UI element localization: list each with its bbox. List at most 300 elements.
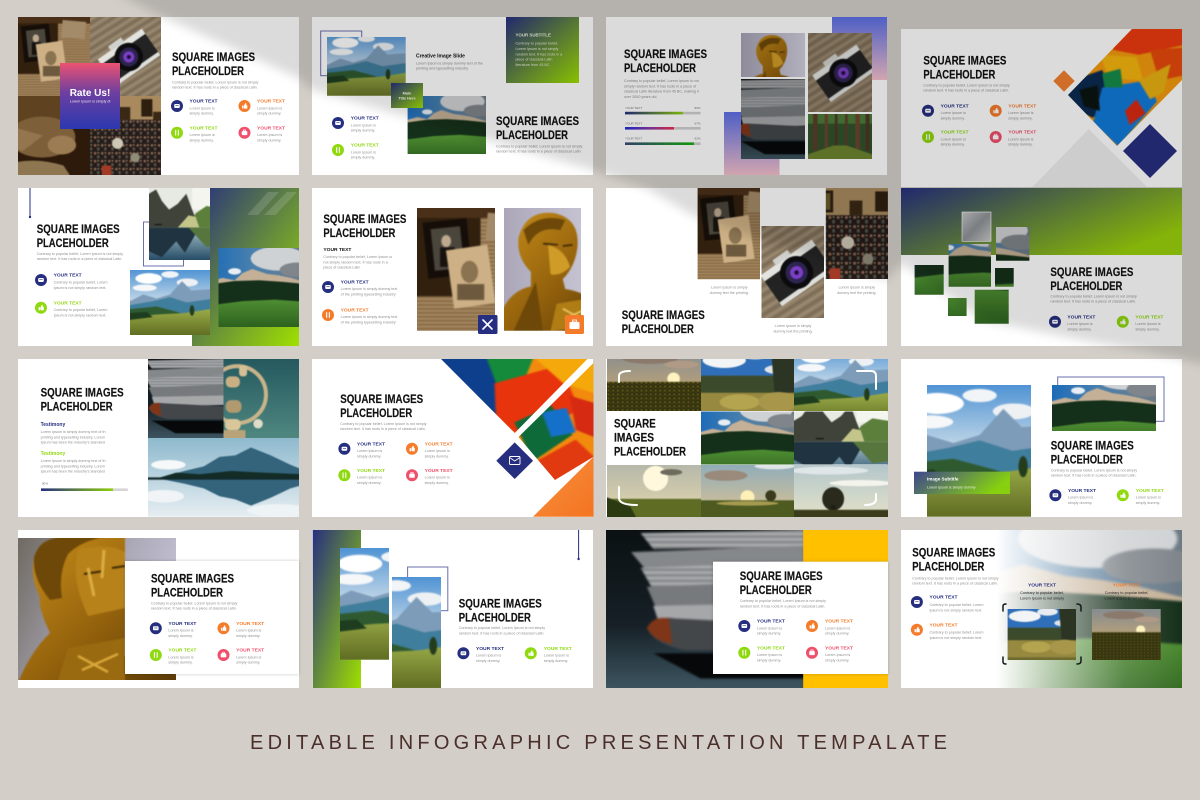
item: navy bbox=[1049, 314, 1095, 331]
heading: SQUARE IMAGES bbox=[1050, 267, 1134, 279]
creative image text: printing and typesetting industry bbox=[416, 67, 468, 71]
photo: lake bbox=[149, 188, 210, 260]
heading: PLACEHOLDER bbox=[323, 228, 396, 240]
item: navy bbox=[1049, 488, 1096, 505]
item: green: YOUR TEXT bbox=[168, 648, 196, 654]
item: green: Lorem Ipsum is bbox=[351, 150, 376, 154]
photo: dolomite backdrop bbox=[901, 509, 1200, 707]
testimony two: printing and typesetting industry. Lorem bbox=[41, 464, 105, 468]
description bbox=[624, 79, 699, 99]
item: navy: YOUR TEXT bbox=[351, 116, 379, 122]
photo: mountain portrait bbox=[927, 385, 1031, 517]
testimony two: Ipsum has been the industry's standard bbox=[41, 470, 105, 474]
item: green bbox=[171, 125, 218, 142]
item: green: simply dummy. bbox=[351, 156, 375, 160]
item: orange: YOUR TEXT bbox=[341, 307, 369, 313]
photo: old books bbox=[18, 17, 90, 96]
item: pink: YOUR TEXT bbox=[257, 125, 285, 131]
caption right bbox=[837, 285, 876, 295]
item: pink: simply dummy. bbox=[257, 138, 281, 142]
photo: boats bbox=[148, 359, 224, 438]
item: navy: YOUR TEXT bbox=[168, 621, 196, 627]
heading bbox=[1050, 267, 1134, 293]
description: random text. It has roots in a piece of classical Latin. bbox=[923, 88, 1009, 92]
photo: forest bbox=[808, 114, 872, 159]
column text navy bbox=[1020, 582, 1064, 600]
item: navy: YOUR TEXT bbox=[476, 646, 504, 652]
window light shadow overlay bbox=[110, 0, 1200, 366]
item: navy: simply dummy. bbox=[476, 659, 500, 663]
item: orange: Lorem Ipsum is bbox=[1008, 111, 1034, 115]
photo: reflection lake bbox=[148, 438, 299, 517]
item: navy bbox=[150, 621, 196, 638]
outline frame bbox=[321, 31, 362, 76]
footer title: EDITABLE INFOGRAPHIC PRESENTATION TEMPALATE bbox=[250, 732, 947, 754]
heading: SQUARE bbox=[614, 419, 656, 431]
photo: meadow trees bbox=[701, 359, 794, 411]
item: green: simply dummy. bbox=[757, 658, 781, 662]
photo: grey sky bbox=[962, 212, 991, 241]
item: orange bbox=[911, 622, 983, 640]
your text block: piece of classical Latin bbox=[323, 266, 360, 270]
subtitle bar: Lorem Ipsum is simply dummy bbox=[927, 485, 976, 489]
testimony one: Lorem Ipsum is simply dummy text of th bbox=[41, 430, 106, 434]
item: green: Lorem Ipsum is bbox=[168, 655, 194, 659]
your text block: Contrary to popular belief, Lorem Ipsum is bbox=[323, 255, 392, 259]
column text orange bbox=[1105, 582, 1149, 600]
item: orange bbox=[990, 103, 1036, 120]
photo: camera bbox=[90, 17, 161, 96]
item: navy: simply dummy. bbox=[168, 634, 193, 638]
slide 16: fading landscape bbox=[901, 509, 1200, 707]
column text orange: Contrary to popular belief, bbox=[1105, 591, 1148, 595]
item: pink bbox=[406, 468, 453, 485]
item: orange: YOUR TEXT bbox=[825, 619, 853, 625]
item: green bbox=[332, 143, 379, 160]
caption right: Lorem Ipsum is simply bbox=[838, 285, 875, 289]
item: orange: simply dummy. bbox=[236, 634, 260, 638]
photo: camera bbox=[762, 226, 824, 318]
subtitle panel: Lorem Ipsum is not simply bbox=[516, 47, 558, 51]
description: Contrary to popular belief, Lorem Ipsum is not simply bbox=[1051, 468, 1137, 472]
item: green: YOUR TEXT bbox=[351, 143, 379, 149]
slide 10: paint stripes bbox=[312, 359, 594, 517]
navy pin line bbox=[29, 188, 31, 218]
item: navy: simply dummy. bbox=[351, 129, 375, 133]
subtitle panel: Contrary to popular belief, bbox=[516, 42, 558, 46]
description bbox=[37, 252, 123, 261]
progress bar 80% bbox=[41, 481, 128, 491]
heading: SQUARE IMAGES bbox=[340, 394, 423, 406]
item: navy: Lorem Ipsum is bbox=[168, 629, 194, 633]
description bbox=[340, 422, 427, 431]
item: orange bbox=[806, 619, 853, 636]
your text block bbox=[323, 247, 392, 270]
description: simply random text. It has roots in a piece of bbox=[624, 84, 697, 88]
description: Contrary to popular belief, Lorem Ipsum is not simply bbox=[496, 144, 582, 148]
heading bbox=[614, 419, 687, 459]
subtitle panel bbox=[506, 17, 579, 83]
photo: gold figure bbox=[741, 33, 805, 77]
item: navy: simply dummy. bbox=[941, 116, 965, 120]
heading: PLACEHOLDER bbox=[172, 66, 245, 78]
slide 8: scattered tiles bbox=[901, 188, 1182, 346]
white fade overlay bbox=[901, 530, 1182, 688]
item: green: simply dummy. bbox=[544, 659, 568, 663]
description: random text. It has roots in a piece of classical Latin. bbox=[1050, 300, 1136, 304]
heading bbox=[172, 52, 255, 78]
heading: PLACEHOLDER bbox=[1050, 281, 1123, 293]
item: navy: YOUR TEXT bbox=[930, 595, 958, 601]
heading: SQUARE IMAGES bbox=[923, 56, 1007, 68]
description: over 2000 years old. bbox=[624, 95, 657, 99]
outline frame bbox=[144, 222, 184, 266]
photo: mountain bbox=[794, 359, 888, 411]
heading: SQUARE IMAGES bbox=[912, 548, 996, 560]
photo: dolomite bbox=[701, 412, 794, 464]
description: Contrary to popular belief, Lorem Ipsum is not simply bbox=[37, 252, 123, 256]
navy diamond with envelope bbox=[496, 442, 533, 479]
heading bbox=[622, 310, 705, 336]
photo: lake bbox=[794, 412, 888, 464]
item: navy: Lorem Ipsum is bbox=[357, 449, 382, 453]
heading: PLACEHOLDER bbox=[37, 238, 109, 250]
item: navy bbox=[332, 116, 379, 133]
subtitle bar: Image Subtitle bbox=[927, 477, 959, 482]
outline frame bbox=[408, 567, 448, 611]
caption middle: dummy text the printing. bbox=[773, 329, 813, 333]
heading bbox=[459, 598, 542, 624]
heading: PLACEHOLDER bbox=[923, 70, 996, 82]
item: navy: YOUR TEXT bbox=[757, 619, 785, 625]
navy pin line bbox=[577, 530, 580, 560]
photo: ferris wheel bbox=[224, 359, 299, 438]
item: navy: YOUR TEXT bbox=[357, 441, 385, 447]
testimony one bbox=[41, 422, 106, 445]
heading: SQUARE IMAGES bbox=[622, 310, 705, 322]
photo: sunset field bbox=[701, 465, 794, 517]
icon tile: briefcase bbox=[565, 315, 584, 334]
white corner brackets bbox=[619, 371, 876, 505]
photo: green field bbox=[974, 290, 1009, 324]
column text navy: YOUR TEXT bbox=[1028, 582, 1056, 588]
dark corner brackets bbox=[1003, 604, 1081, 664]
slide 13: gold figure card bbox=[18, 530, 299, 688]
photo: lone tree bbox=[794, 465, 888, 517]
heading: SQUARE IMAGES bbox=[323, 214, 407, 226]
item: green: simply dummy. bbox=[941, 143, 965, 147]
slide 2: creative image slide bbox=[312, 17, 593, 175]
icon tile: tools bbox=[478, 315, 498, 334]
decorative parallelograms bbox=[247, 192, 297, 215]
gradient panel bbox=[192, 188, 299, 346]
item: navy: Lorem Ipsum is bbox=[190, 106, 215, 110]
item: pink: Lorem Ipsum is bbox=[257, 133, 282, 137]
subtitle bar bbox=[914, 472, 1010, 494]
progress bar 80%: YOUR TEXT bbox=[625, 106, 642, 110]
item: green bbox=[525, 646, 572, 663]
item: navy bbox=[322, 279, 397, 296]
slide 15: boats and yellow bbox=[606, 530, 888, 688]
caption left bbox=[710, 285, 749, 295]
description: classical Latin literature from 45 BC, making it bbox=[624, 90, 699, 94]
item: navy: Contrary to popular belief, Lorem bbox=[54, 280, 108, 284]
progress bar 67%: YOUR TEXT bbox=[625, 121, 642, 125]
item: green: YOUR TEXT bbox=[54, 300, 82, 306]
description: random text. It has roots in a piece of classical Latin. bbox=[37, 257, 122, 261]
photo: crowd bbox=[826, 188, 888, 279]
rate us card bbox=[60, 63, 120, 129]
progress bar 67% bbox=[625, 121, 701, 130]
item: navy: simply dummy. bbox=[1067, 327, 1092, 331]
your text block: not simply random text. It has roots in a bbox=[323, 260, 389, 264]
gradient panel bbox=[313, 530, 361, 688]
item: pink bbox=[238, 125, 285, 142]
subtitle panel: random text. It has roots in a bbox=[516, 52, 563, 56]
photo: mountain bbox=[327, 37, 406, 96]
item: green: simply dummy. bbox=[1136, 501, 1160, 505]
subtitle panel: YOUR SUBTITLE bbox=[516, 32, 551, 38]
item: pink: simply dummy. bbox=[236, 661, 260, 665]
description: random text. It has roots in a piece of classical Latin. bbox=[912, 582, 998, 586]
item: pink: YOUR TEXT bbox=[1008, 130, 1036, 136]
progress bar 67%: 67% bbox=[694, 121, 701, 125]
item: navy: Lorem Ipsum is bbox=[941, 111, 966, 115]
item: navy bbox=[338, 441, 385, 458]
yellow panel bbox=[803, 530, 888, 688]
description: Contrary to popular belief, Lorem Ipsum is not simply bbox=[912, 577, 999, 581]
item: navy: simply dummy. bbox=[757, 632, 781, 636]
item: navy: Lorem Ipsum is simply dummy text bbox=[341, 287, 397, 291]
item: navy bbox=[171, 99, 218, 116]
item: navy: Lorem Ipsum is bbox=[476, 654, 501, 658]
column text navy: Lorem Ipsum is not simply bbox=[1020, 596, 1064, 600]
description: Contrary to popular belief, Lorem Ipsum is not simply bbox=[923, 83, 1010, 87]
progress bar 92% bbox=[625, 137, 701, 145]
item: navy: simply dummy. bbox=[1068, 501, 1092, 505]
description: random text. It has roots in a piece of classical Latin. bbox=[1051, 474, 1136, 478]
photo: paint diamond bbox=[1068, 29, 1182, 146]
heading: SQUARE IMAGES bbox=[41, 388, 124, 400]
description: Contrary to popular belief, Lorem Ipsum is not simply bbox=[340, 422, 427, 426]
heading: PLACEHOLDER bbox=[1051, 454, 1123, 466]
item: green: YOUR TEXT bbox=[544, 646, 572, 652]
description bbox=[912, 577, 999, 586]
heading bbox=[923, 56, 1007, 82]
gradient block bottom bbox=[724, 112, 780, 175]
testimony two: Lorem Ipsum is simply dummy text of th bbox=[41, 459, 106, 463]
item: green: YOUR TEXT bbox=[941, 130, 969, 136]
photo: dolomite bbox=[408, 96, 486, 154]
description bbox=[923, 83, 1010, 92]
photo: crowd bbox=[90, 96, 161, 175]
item: orange: Lorem Ipsum is bbox=[257, 106, 282, 110]
photo: sunrise vineyard bbox=[607, 465, 701, 517]
navy diamond bbox=[1123, 124, 1177, 178]
slide 14: split mountain bbox=[312, 530, 593, 688]
gradient band bbox=[901, 188, 1182, 255]
creative image text: Lorem Ipsum is simply dummy text of the bbox=[416, 61, 483, 65]
item: green: simply dummy. bbox=[190, 138, 214, 142]
photo: paint upper bbox=[441, 359, 588, 433]
heading bbox=[37, 224, 120, 250]
item: navy: YOUR TEXT bbox=[54, 273, 82, 279]
item: green: Lorem Ipsum is bbox=[544, 654, 569, 658]
column text orange: YOUR TEXT bbox=[1113, 582, 1141, 588]
heading: SQUARE IMAGES bbox=[172, 52, 255, 64]
item: green: simply dummy. bbox=[357, 481, 381, 485]
item: pink: simply dummy. bbox=[825, 658, 849, 662]
item: green: Lorem Ipsum is bbox=[1136, 496, 1161, 500]
heading: PLACEHOLDER bbox=[340, 408, 413, 420]
orange corner bbox=[533, 457, 594, 517]
photo: sunflower sunset bbox=[607, 359, 701, 411]
description bbox=[151, 602, 237, 611]
caption left: dummy text the printing. bbox=[710, 291, 749, 295]
heading bbox=[624, 49, 707, 75]
progress bar 80% bbox=[625, 106, 701, 114]
item: navy: of the printing typesetting industry bbox=[341, 292, 396, 296]
testimony one: Testimony bbox=[41, 422, 65, 428]
heading: PLACEHOLDER bbox=[912, 562, 985, 574]
item: green: YOUR TEXT bbox=[357, 468, 385, 474]
photo: meadow trees bbox=[1008, 606, 1079, 663]
description: random text. It has roots in a piece of classical Latin. bbox=[740, 604, 825, 608]
photo: mountain left slice bbox=[340, 548, 389, 660]
item: green bbox=[150, 648, 196, 665]
item: pink: simply dummy. bbox=[425, 481, 449, 485]
slide 1: rate us bbox=[9, 17, 299, 175]
heading: SQUARE IMAGES bbox=[1051, 440, 1134, 452]
item: pink: Lorem Ipsum is bbox=[1008, 137, 1034, 141]
item: navy: Lorem Ipsum is bbox=[1068, 496, 1093, 500]
photo: cat bbox=[18, 96, 90, 175]
item: navy bbox=[457, 646, 504, 663]
photo: sky and peak bbox=[996, 227, 1030, 261]
description bbox=[172, 80, 258, 90]
item: navy bbox=[35, 273, 108, 290]
subtitle panel: piece of classical Latin bbox=[516, 58, 552, 62]
item: green: Lorem Ipsum is bbox=[757, 653, 782, 657]
item: green: Lorem Ipsum is bbox=[190, 133, 215, 137]
item: navy: YOUR TEXT bbox=[941, 103, 969, 109]
white card bbox=[713, 562, 888, 674]
item: orange: YOUR TEXT bbox=[236, 621, 264, 627]
slide 5: gradient collage bbox=[18, 188, 315, 346]
item: pink bbox=[806, 645, 853, 662]
heading bbox=[151, 574, 234, 600]
main title card: Title Here bbox=[398, 96, 416, 100]
photo: dark forest bbox=[995, 268, 1014, 287]
item: navy bbox=[922, 103, 969, 120]
caption right: dummy text the printing. bbox=[837, 291, 876, 295]
photo: dolomite bbox=[218, 248, 299, 327]
rate us card: Rate Us! bbox=[70, 88, 110, 99]
photo: dolomite bbox=[948, 244, 991, 287]
testimony two: Testimony bbox=[41, 451, 65, 457]
photo: mountain bbox=[130, 270, 210, 335]
grey triangle bbox=[1032, 129, 1147, 187]
item: orange: Ipsum is not simply random text. bbox=[930, 636, 982, 640]
heading: PLACEHOLDER bbox=[151, 588, 224, 600]
photo: boats bbox=[606, 530, 803, 688]
heading: IMAGES bbox=[614, 433, 654, 445]
photo: camera bbox=[808, 33, 872, 112]
photo: gold figure bbox=[504, 208, 581, 331]
testimony one: printing and typesetting industry. Lorem bbox=[41, 435, 105, 439]
item: green bbox=[1117, 488, 1164, 505]
item: pink: simply dummy. bbox=[1008, 143, 1033, 147]
column text orange: Lorem Ipsum is not simply bbox=[1105, 596, 1149, 600]
description bbox=[496, 144, 582, 154]
description: Contrary to popular belief, Lorem Ipsum is not simply bbox=[459, 626, 545, 630]
description: Contrary to popular belief, Lorem Ipsum is not simply bbox=[740, 599, 826, 603]
item: green: YOUR TEXT bbox=[190, 125, 218, 131]
heading: PLACEHOLDER bbox=[614, 447, 687, 459]
item: navy: Lorem Ipsum is bbox=[757, 626, 782, 630]
item: orange: simply dummy. bbox=[825, 632, 849, 636]
item: navy bbox=[911, 595, 983, 612]
description: random text. It has roots in a piece of classical Latin. bbox=[459, 631, 544, 635]
photo: old books bbox=[417, 208, 495, 331]
item: pink bbox=[990, 130, 1036, 147]
item: green: simply dummy. bbox=[168, 661, 193, 665]
main title card: Main bbox=[403, 91, 412, 95]
item: navy: YOUR TEXT bbox=[1068, 488, 1096, 494]
item: green: Lorem Ipsum is bbox=[357, 476, 382, 480]
heading bbox=[740, 571, 823, 597]
description: random text. It has roots in a piece of classical Latin. bbox=[340, 427, 426, 431]
item: pink: Lorem Ipsum is bbox=[236, 655, 261, 659]
slide 11: photo grid bbox=[606, 346, 892, 530]
item: navy: Ipsum is not simply random text. bbox=[930, 608, 982, 612]
testimony two bbox=[41, 451, 106, 474]
heading: PLACEHOLDER bbox=[41, 402, 113, 414]
item: orange: of the printing typesetting industry bbox=[341, 320, 396, 324]
slide 4: diamonds bbox=[901, 29, 1182, 187]
item: navy: YOUR TEXT bbox=[341, 279, 369, 285]
photo: old books bbox=[698, 188, 760, 280]
heading bbox=[340, 394, 423, 420]
item: green bbox=[922, 130, 969, 147]
item: orange: YOUR TEXT bbox=[425, 441, 453, 447]
item: orange bbox=[322, 307, 397, 324]
item: orange: Lorem Ipsum is bbox=[236, 629, 261, 633]
item: green: Contrary to popular belief, Lorem bbox=[54, 308, 108, 312]
slide 9: testimony bbox=[18, 359, 310, 517]
item: green bbox=[35, 300, 108, 318]
item: orange: simply dummy. bbox=[425, 454, 449, 458]
item: orange: YOUR TEXT bbox=[1008, 103, 1036, 109]
photo: dolomite bbox=[1052, 385, 1156, 431]
rate us card: Lorem Ipsum is simply dl bbox=[70, 100, 110, 104]
progress bar 92%: YOUR TEXT bbox=[625, 137, 642, 141]
description: Contrary to popular belief, Lorem Ipsum is not simply bbox=[1050, 295, 1137, 299]
description bbox=[1050, 295, 1137, 304]
white card bbox=[125, 561, 299, 674]
item: orange bbox=[218, 621, 264, 638]
heading: SQUARE IMAGES bbox=[151, 574, 234, 586]
photo: small field bbox=[948, 298, 967, 316]
description: Contrary to popular belief, Lorem Ipsum is not simply bbox=[151, 602, 237, 606]
item: pink: Lorem Ipsum is bbox=[425, 476, 450, 480]
item: orange: YOUR TEXT bbox=[930, 622, 958, 628]
heading: SQUARE IMAGES bbox=[740, 571, 823, 583]
item: green: Lorem Ipsum is bbox=[941, 137, 966, 141]
item: pink bbox=[218, 648, 264, 665]
heading: SQUARE IMAGES bbox=[496, 116, 579, 128]
heading: PLACEHOLDER bbox=[496, 130, 569, 142]
